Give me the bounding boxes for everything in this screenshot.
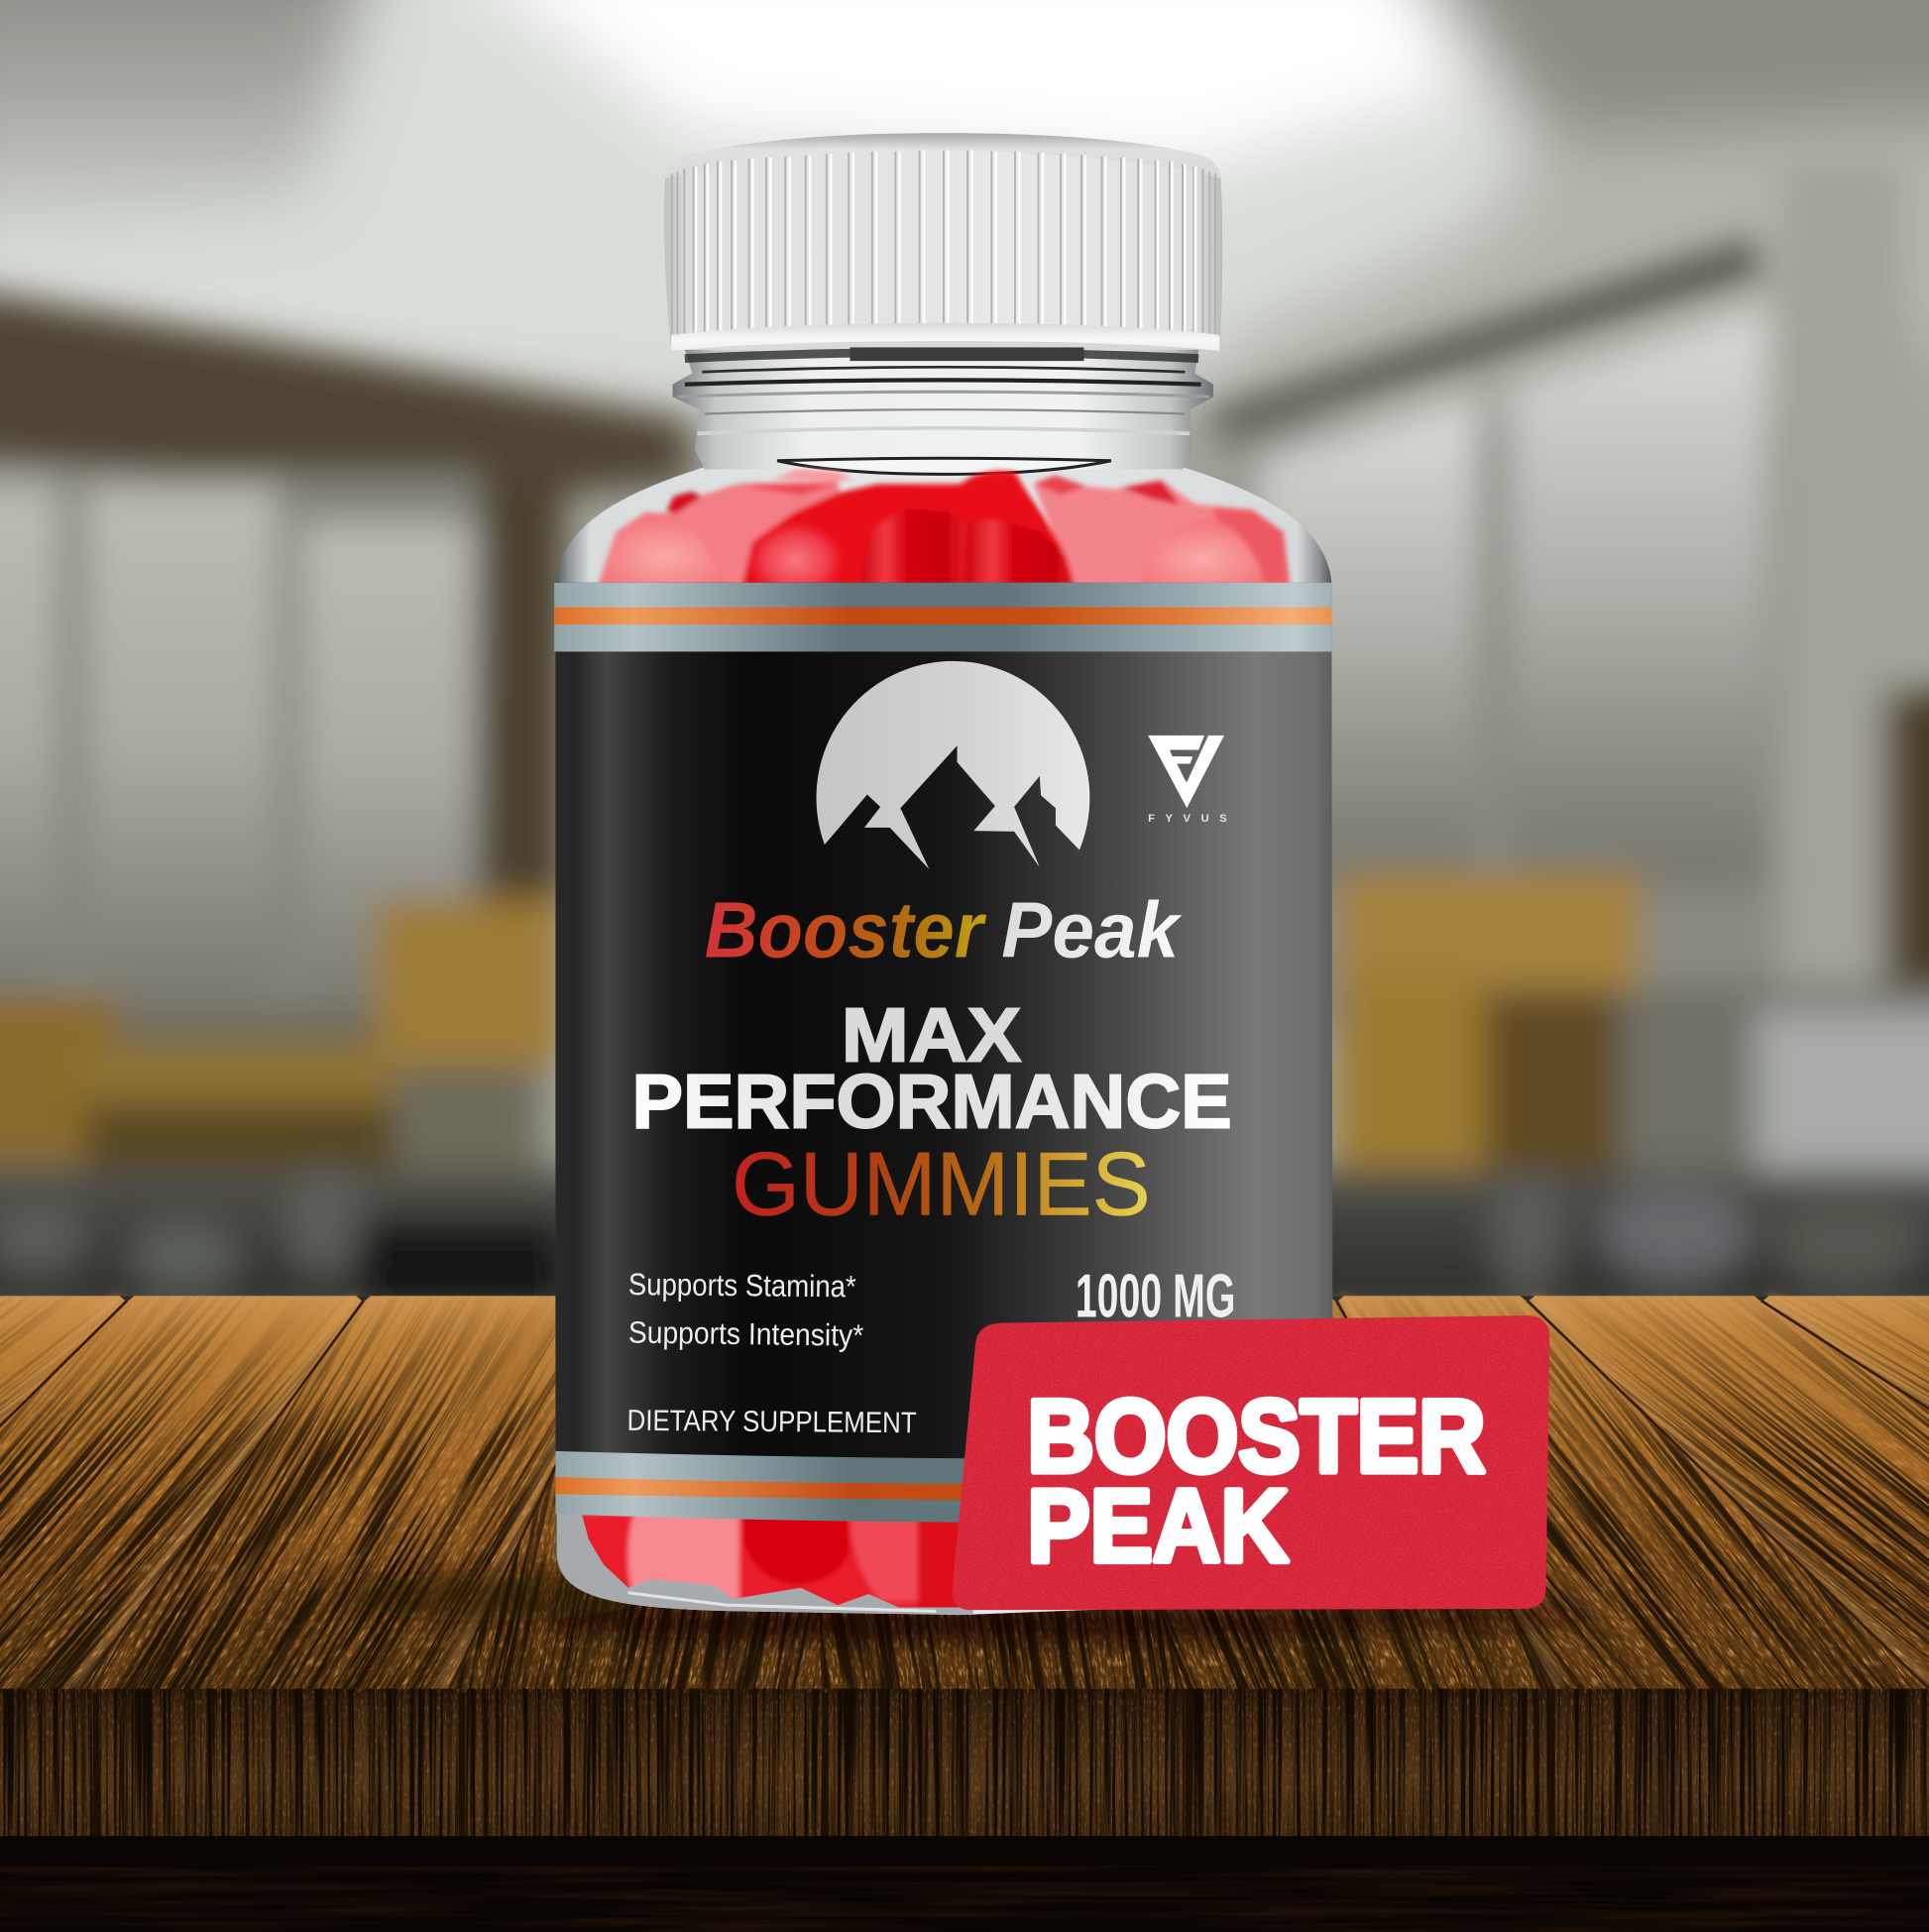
brand name: Peak <box>1001 886 1183 974</box>
benefit claims <box>628 1267 863 1353</box>
red brand card <box>953 1315 1549 1610</box>
top stripes <box>554 583 1331 651</box>
cap rim <box>671 323 1219 351</box>
cap ridges <box>672 151 1215 340</box>
brand name <box>705 886 1183 974</box>
shadow under bottle and card <box>339 1572 1589 1642</box>
brand name: Booster <box>705 886 986 974</box>
bottom glass highlight <box>628 1593 936 1611</box>
mountain logo <box>816 661 1089 869</box>
bottom stripes <box>555 1451 985 1523</box>
central red gummies <box>741 471 1076 587</box>
card wordmark: BOOSTER <box>1027 1379 1486 1494</box>
room structure and furniture <box>0 161 1929 1318</box>
label <box>554 583 1333 1523</box>
cap <box>664 133 1222 351</box>
left pink gummies <box>598 481 862 587</box>
table front edge <box>0 1689 1929 1839</box>
supplement line: DIETARY SUPPLEMENT <box>626 1405 917 1439</box>
card shape <box>953 1315 1549 1610</box>
benefit claims: Supports Intensity* <box>628 1315 863 1353</box>
glass neck <box>672 347 1213 474</box>
product title: GUMMIES <box>732 1134 1151 1234</box>
product title: PERFORMANCE <box>631 1060 1232 1145</box>
wooden table <box>0 1296 1929 1932</box>
table underside <box>0 1838 1929 1932</box>
FYVUS logo: FYVUS <box>1148 813 1227 825</box>
glass body <box>555 467 1331 1615</box>
card wordmark: PEAK <box>1027 1469 1289 1584</box>
table top surface <box>0 1296 1929 1690</box>
gummies seen below the label <box>579 1513 973 1611</box>
FYVUS logo <box>1148 736 1227 825</box>
glass base tint <box>557 1509 973 1615</box>
product title: MAX <box>842 993 1021 1079</box>
card wordmark <box>1027 1379 1486 1584</box>
dose: 1000 MG <box>1076 1262 1235 1330</box>
product title <box>631 993 1232 1234</box>
label background <box>555 583 1333 1468</box>
right pink gummies <box>1034 476 1290 587</box>
benefit claims: Supports Stamina* <box>628 1267 856 1304</box>
gummies seen above the label <box>598 469 1290 603</box>
product bottle <box>554 133 1333 1615</box>
